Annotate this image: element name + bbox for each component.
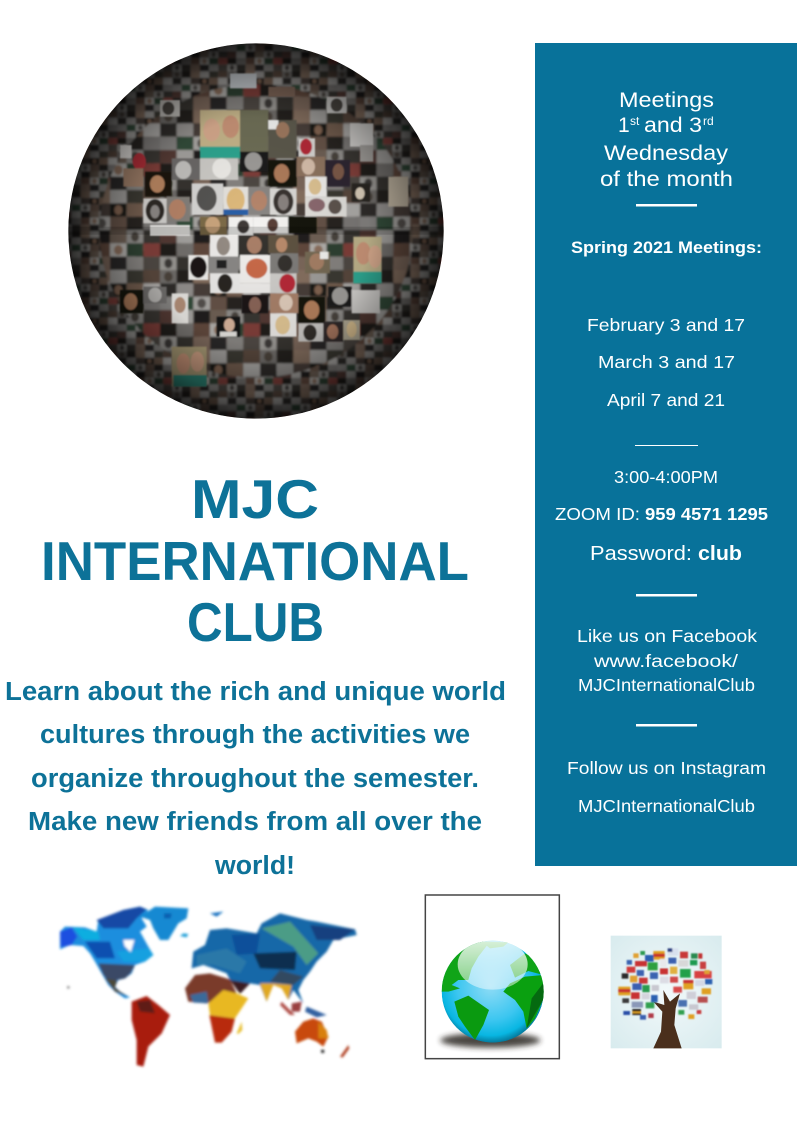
zoom details: Password:	[590, 542, 692, 565]
meeting dates: April 7 and 21	[607, 390, 725, 410]
facebook details: Like us on Facebook	[577, 626, 757, 646]
title	[41, 468, 469, 653]
instagram details: MJCInternationalClub	[578, 796, 755, 816]
panel: meeting information	[535, 43, 797, 866]
facebook details: www.facebook/	[593, 651, 738, 671]
instagram details	[567, 758, 766, 816]
description text: organize throughout the semester.	[31, 765, 479, 793]
icon: flag tree	[611, 936, 722, 1048]
meeting schedule text: 1	[618, 114, 630, 137]
icon: watercolor world map	[60, 907, 357, 1067]
flags	[618, 948, 712, 1020]
meeting schedule text: Meetings	[619, 89, 714, 112]
spring meetings heading: Spring 2021 Meetings:	[571, 239, 762, 257]
meeting schedule text: Wednesday	[604, 142, 729, 165]
title: INTERNATIONAL	[41, 530, 469, 592]
tree trunk	[653, 990, 682, 1048]
meeting dates: February 3 and 17	[587, 315, 745, 335]
icon: framed globe	[425, 895, 559, 1059]
meeting dates: March 3 and 17	[598, 352, 735, 372]
meeting schedule text: rd	[703, 114, 714, 128]
photo mosaic sphere	[60, 37, 460, 423]
description text	[5, 678, 506, 880]
title: MJC	[191, 468, 319, 530]
meeting dates	[587, 315, 745, 410]
globe	[442, 939, 545, 1043]
meeting schedule text: and 3	[644, 114, 702, 137]
zoom details: 959 4571 1295	[645, 504, 768, 524]
meeting schedule text: st	[630, 114, 640, 128]
globe shadow	[440, 1033, 540, 1048]
description text: Make new friends from all over the	[28, 808, 482, 836]
title: CLUB	[187, 591, 324, 653]
description text: Learn about the rich and unique world	[5, 678, 506, 706]
description text: world!	[214, 852, 295, 880]
description text: cultures through the activities we	[40, 721, 470, 749]
zoom details: ZOOM ID:	[555, 504, 640, 524]
zoom details: club	[698, 542, 742, 565]
zoom details: 3:00-4:00PM	[614, 467, 718, 487]
zoom details	[555, 467, 768, 565]
meeting schedule text: of the month	[600, 168, 733, 191]
meeting schedule text	[600, 89, 733, 191]
instagram details: Follow us on Instagram	[567, 758, 766, 778]
facebook details	[577, 626, 757, 695]
facebook details: MJCInternationalClub	[578, 675, 755, 695]
